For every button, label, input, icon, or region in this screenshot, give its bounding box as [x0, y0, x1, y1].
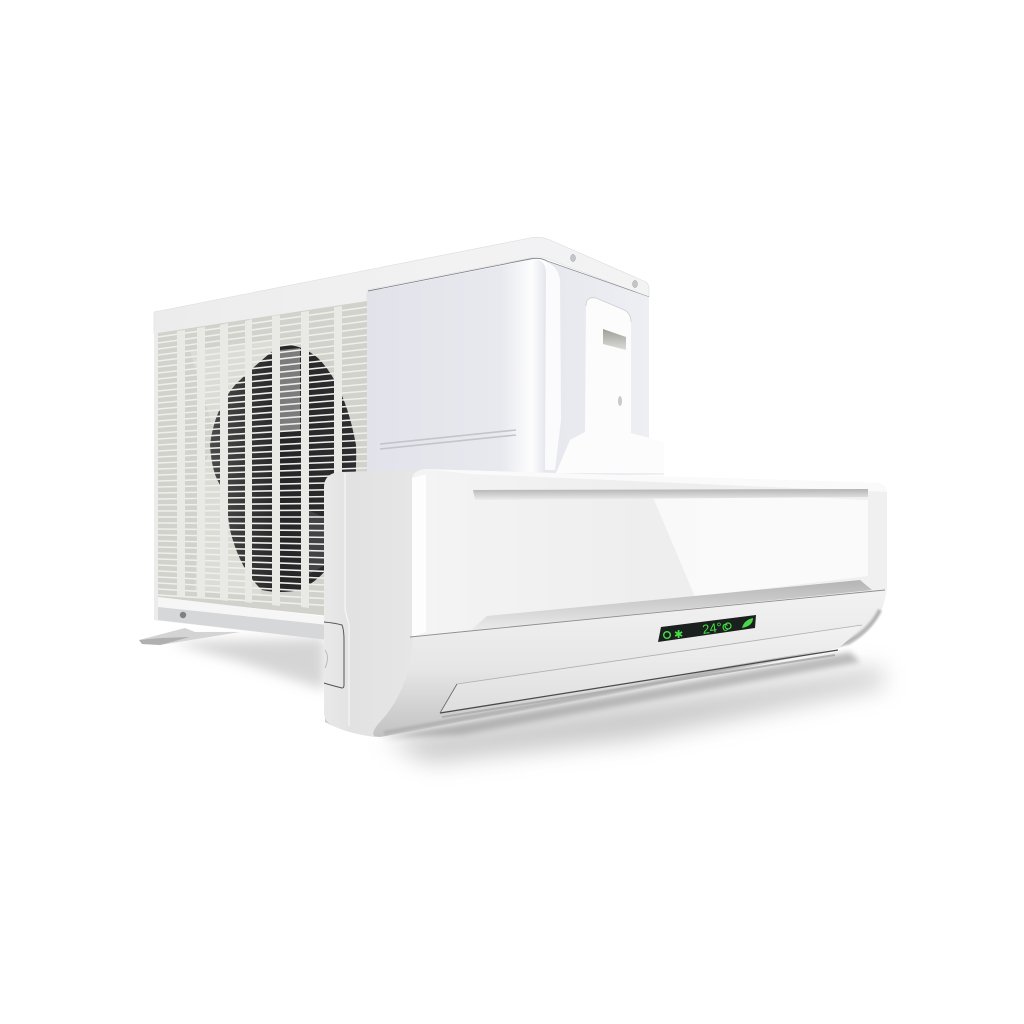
outdoor unit: fan	[190, 340, 356, 596]
outdoor unit: front solid panel	[367, 260, 546, 475]
ground shadows	[170, 638, 885, 762]
outdoor unit: bottom band and base	[139, 330, 328, 645]
display: power icon	[664, 632, 670, 638]
outdoor unit: service valve cover	[556, 298, 664, 473]
outdoor unit: panel seam lines	[368, 258, 649, 470]
outdoor unit: right side	[546, 261, 664, 475]
indoor unit: display strip	[658, 615, 756, 642]
indoor unit: left end cap	[324, 470, 414, 737]
indoor unit: front panel	[412, 469, 887, 637]
indoor unit: panel top bevel	[425, 469, 887, 492]
outdoor unit: grille background	[158, 301, 367, 620]
display: leaf icon	[742, 618, 753, 628]
outdoor unit: horizontal louvres	[158, 307, 367, 608]
outdoor unit	[139, 237, 664, 645]
indoor unit: bottom edge shading	[384, 610, 880, 733]
indoor unit: panel bottom shadow line	[410, 590, 885, 637]
outdoor unit: top lid	[154, 237, 649, 334]
indoor unit: glossy reflection	[650, 490, 868, 597]
indoor unit: air vent	[440, 625, 862, 717]
outdoor unit: vertical guards	[177, 306, 342, 612]
indoor unit: cap service door	[324, 622, 344, 688]
display: temperature: 24°c	[701, 618, 730, 637]
indoor unit: lower slot	[470, 580, 872, 631]
indoor unit: lower body	[325, 586, 887, 737]
indoor unit: cap seams	[345, 473, 349, 726]
indoor unit	[324, 469, 887, 737]
display: timer icon	[725, 623, 731, 629]
display: snow icon: ✱	[674, 629, 683, 641]
outdoor unit: screws	[571, 254, 637, 288]
indoor unit: panel edge highlight	[412, 474, 426, 637]
outdoor unit: corner highlight	[545, 262, 561, 470]
indoor unit: upper slot	[473, 489, 868, 500]
